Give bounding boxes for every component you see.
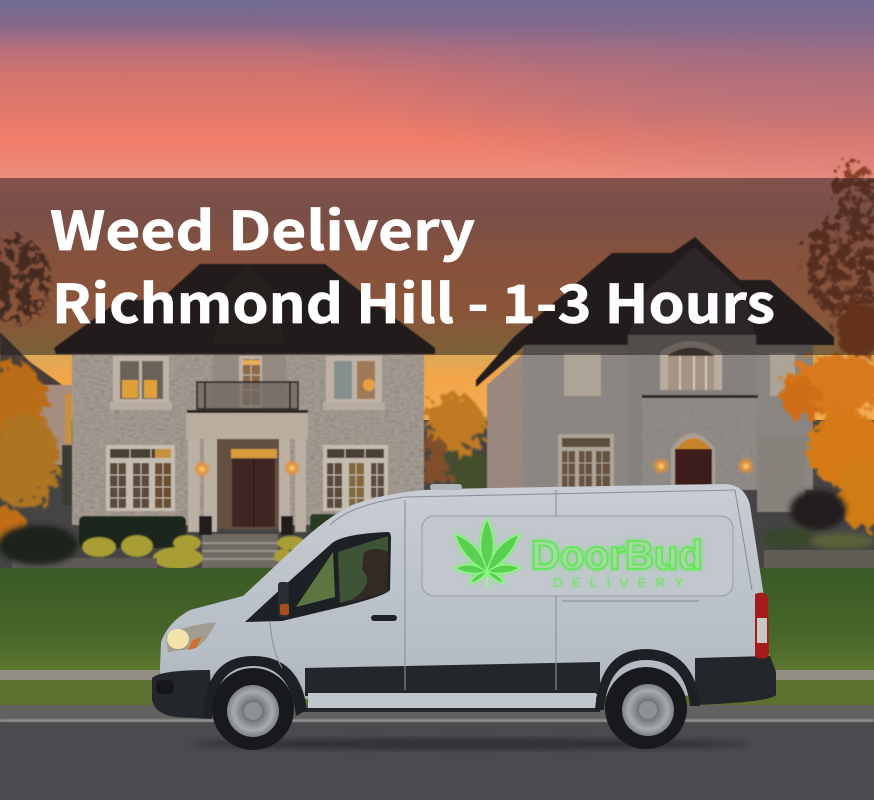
yellow shrubs (82, 535, 305, 569)
bumper grille (156, 680, 174, 694)
wing mirror (278, 582, 289, 617)
upper window left (110, 356, 172, 410)
right house front wall (523, 335, 813, 490)
dark shrubs right (762, 490, 874, 549)
rear bumper (695, 656, 776, 705)
hedge right (310, 514, 340, 532)
upper right window right house (770, 353, 795, 396)
neighbouring house left (0, 332, 72, 505)
left house walls (72, 345, 424, 525)
rear wheel arch (595, 649, 700, 710)
tree: dark branches left (0, 238, 52, 326)
gable window (660, 341, 722, 390)
planters (199, 516, 293, 535)
delivery van (152, 484, 776, 750)
right house side wall (487, 352, 525, 490)
portico (186, 410, 308, 529)
side crease (562, 600, 699, 602)
entry steps (202, 534, 278, 568)
front door (231, 449, 277, 527)
stone wall (12, 558, 157, 583)
hedge (79, 516, 186, 548)
road (0, 719, 874, 800)
lower window right (323, 445, 388, 511)
front lawn (0, 568, 874, 671)
door seams (270, 490, 752, 690)
lower window right house (558, 434, 614, 490)
van body (160, 484, 776, 700)
title (50, 190, 775, 339)
lower foliage (834, 302, 874, 358)
sidewalk (0, 670, 874, 680)
balcony railing (197, 382, 298, 409)
upper window centre (239, 356, 262, 408)
porch lamps (193, 459, 301, 478)
curb (0, 705, 874, 719)
side window (245, 532, 391, 622)
lower lawn strip (0, 680, 874, 706)
left house roof (54, 264, 435, 354)
sunset sky (0, 0, 874, 420)
neon cannabis leaf logo (455, 519, 520, 588)
left house centre bay (213, 345, 286, 525)
rocker skirt (300, 708, 600, 712)
title line 2: Richmond Hill - 1-3 Hours (52, 263, 775, 339)
right house roof (476, 237, 834, 387)
roof vent (430, 484, 462, 490)
front wheel (212, 668, 294, 750)
cargo panel (422, 516, 733, 596)
front bumper (152, 670, 212, 719)
tail light (755, 593, 769, 659)
lower trim (305, 662, 600, 696)
front wheel arch (203, 656, 307, 718)
left house roof gable (213, 264, 285, 345)
right house tower (628, 335, 756, 490)
right house (476, 237, 834, 512)
rear wheel (605, 667, 687, 749)
van shadow (190, 738, 750, 750)
headlight (166, 622, 216, 652)
tree: dark red top right (806, 163, 874, 358)
tree: orange maple left (0, 362, 60, 543)
neon wordmark DELIVERY: DELIVERY (553, 575, 683, 590)
upper window right (323, 356, 385, 410)
dark shrubs left (0, 525, 78, 565)
right porch lamps (652, 457, 755, 475)
stone wall right (764, 550, 874, 569)
arched porch (642, 395, 758, 490)
rocker panel (308, 693, 596, 708)
translucent title band (0, 178, 874, 355)
title line 1: Weed Delivery (50, 190, 475, 266)
lower right window right house (757, 436, 805, 512)
upper foliage (806, 163, 874, 320)
right house gable (628, 247, 755, 335)
background sunset trees (421, 395, 492, 492)
portico columns (188, 439, 306, 532)
neon wordmark DoorBud: DoorBud (531, 532, 703, 578)
tree: orange maple right (780, 355, 874, 531)
lower window left (106, 445, 175, 511)
upper window right house (564, 353, 601, 396)
door handle (371, 615, 397, 621)
left house (12, 264, 435, 583)
